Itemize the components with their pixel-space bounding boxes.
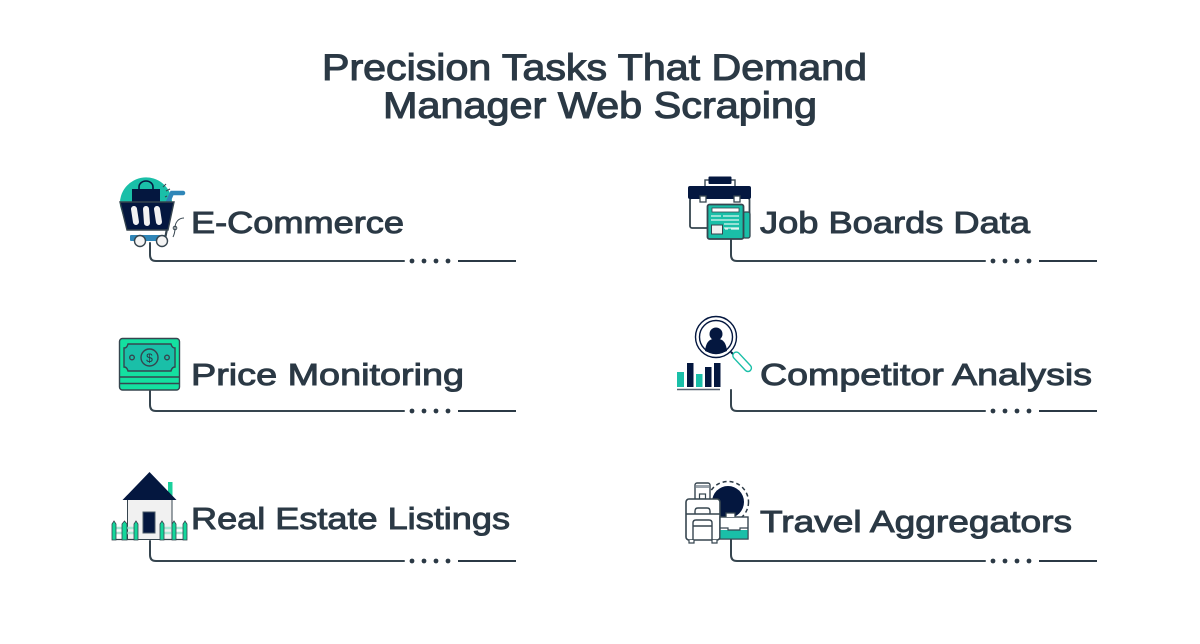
icon: banknotes: $	[146, 351, 153, 365]
connector line	[731, 240, 1097, 263]
icon: luggage and sun	[686, 482, 748, 543]
panel: price monitoring	[120, 338, 516, 413]
connector line	[150, 243, 516, 263]
title: Manager Web Scraping	[383, 85, 817, 126]
label: job boards data: Job Boards Data	[760, 205, 1031, 240]
connector line	[150, 541, 516, 563]
icon: toolbox and newspaper	[688, 176, 751, 239]
icon: magnifier with person and bars	[677, 316, 753, 390]
connector line	[731, 390, 1097, 413]
icon: house with fence	[112, 472, 187, 540]
label: competitor analysis: Competitor Analysis	[760, 357, 1092, 392]
title	[322, 47, 867, 126]
panel: real estate listings	[112, 472, 516, 563]
label: real estate listings: Real Estate Listings	[191, 501, 510, 536]
label: travel aggregators: Travel Aggregators	[760, 504, 1072, 539]
panel: job boards data	[688, 176, 1097, 263]
connector line	[150, 391, 516, 413]
icon: banknotes	[120, 338, 180, 390]
label: price monitoring: Price Monitoring	[191, 357, 464, 392]
connector line	[731, 540, 1097, 563]
title: Precision Tasks That Demand	[322, 47, 867, 88]
label: e-commerce: E-Commerce	[191, 205, 404, 240]
icon: shopping cart	[120, 177, 184, 246]
panel: e-commerce	[120, 177, 516, 263]
panel: travel aggregators	[686, 482, 1097, 563]
panel: competitor analysis	[677, 316, 1097, 413]
